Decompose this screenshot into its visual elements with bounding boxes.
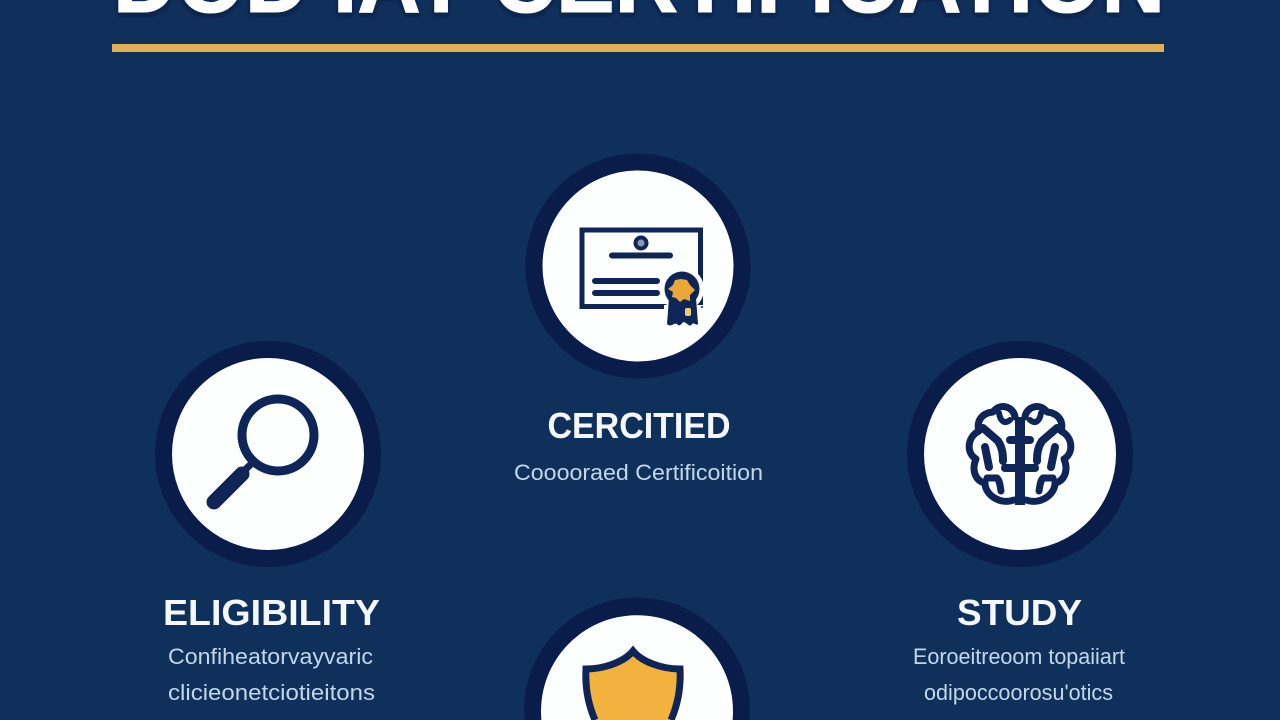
description: certified: Cooooraed Certificoition (514, 460, 763, 485)
icon: magnifying glass (164, 350, 372, 558)
description: study: Eoroeitreoom topaiiart (913, 644, 1125, 669)
heading: eligibility: ELIGIBILITY (163, 592, 380, 633)
panel: eligibility (163, 350, 380, 705)
heading: certified: CERCITIED (548, 405, 730, 446)
description: study (913, 644, 1125, 705)
description: eligibility: Confiheatorvayvaric (168, 644, 373, 669)
icon: brain (916, 350, 1124, 558)
icon: shield (524, 598, 750, 720)
gold title rule (112, 44, 1164, 52)
panel: study (913, 350, 1125, 705)
description: eligibility (168, 644, 375, 705)
icon: certificate with rosette (534, 162, 742, 370)
description: eligibility: clicieonetciotieitons (168, 680, 375, 705)
panel: shield (524, 598, 750, 720)
panel: certified (514, 162, 763, 485)
description: study: odipoccoorosu'otics (924, 680, 1113, 705)
heading: study: STUDY (957, 592, 1082, 633)
